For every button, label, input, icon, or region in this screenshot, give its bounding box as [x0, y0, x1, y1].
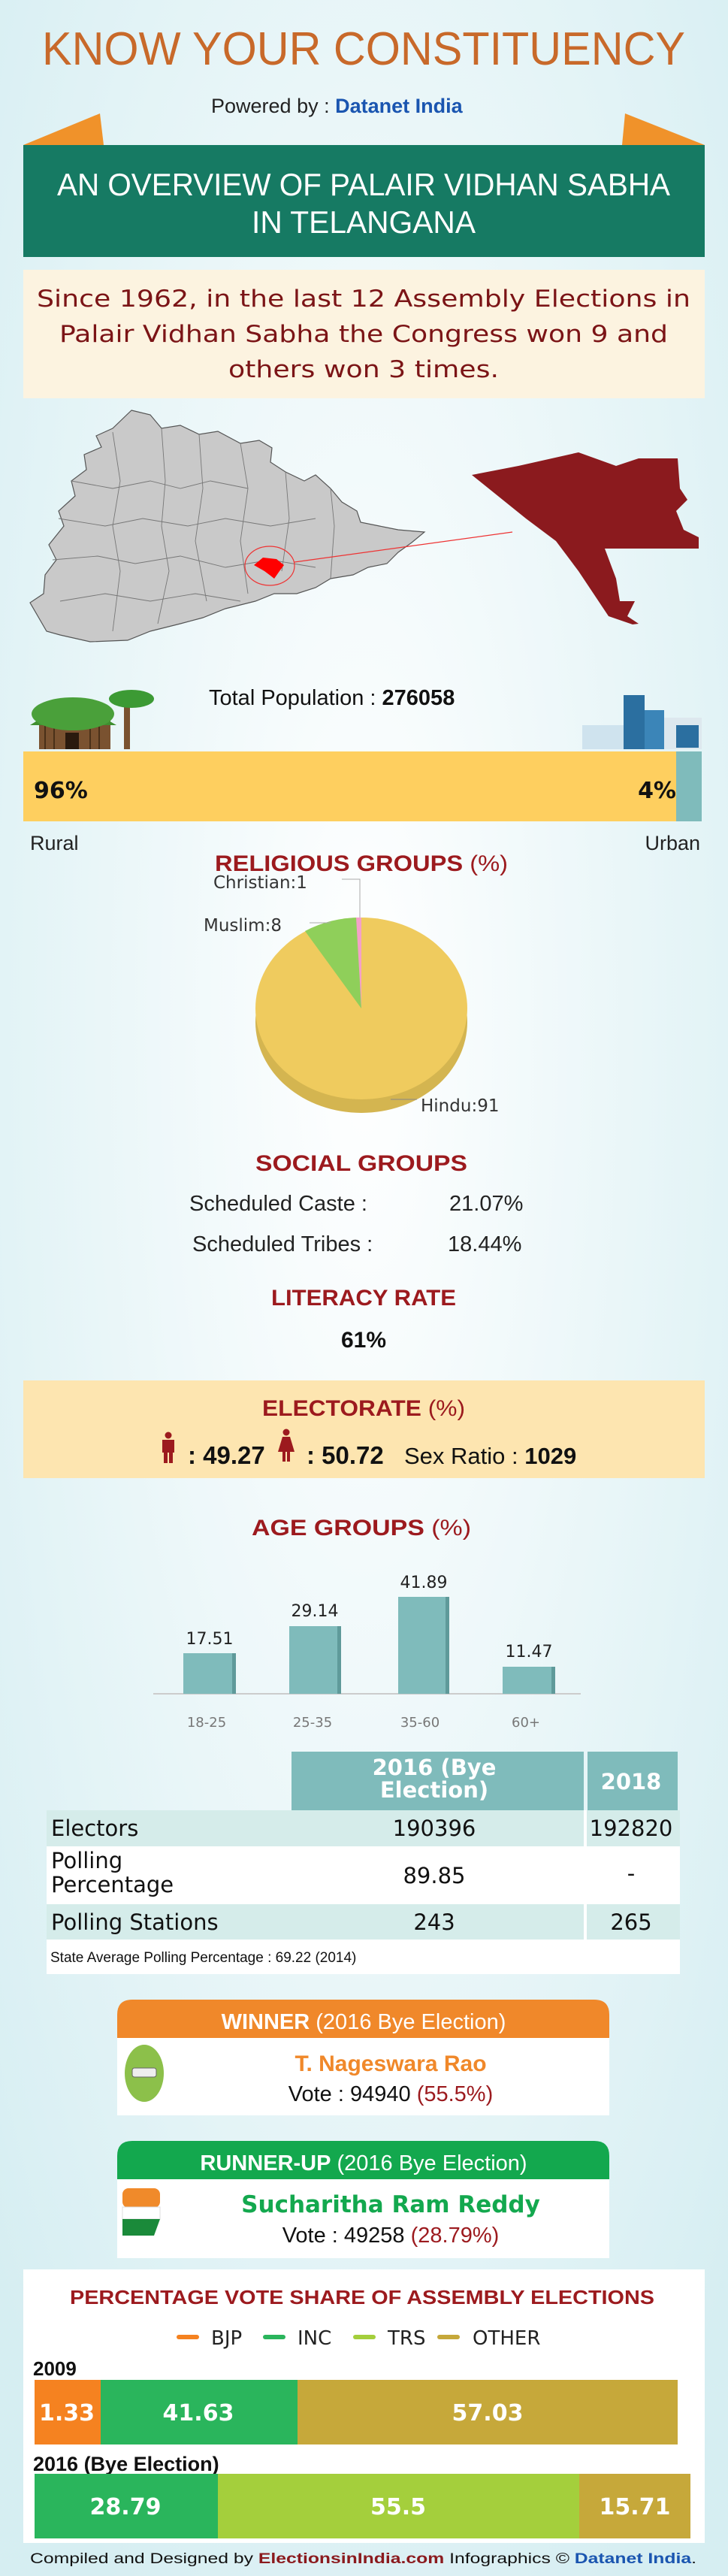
social groups values: 21.07%	[449, 1192, 523, 1216]
bar chart: age groups: 17.51	[186, 1630, 233, 1649]
social groups values: Scheduled Tribes :	[192, 1232, 373, 1256]
panel: runner-up: Vote : 49258 (28.79%)	[282, 2224, 499, 2248]
icon: rural hut	[30, 690, 154, 749]
panel: winner: Vote : 94940 (55.5%)	[288, 2082, 493, 2106]
title: KNOW YOUR CONSTITUENCY	[42, 23, 685, 75]
panel: winner: T. Nageswara Rao	[295, 2051, 487, 2076]
summary text block: Since 1962, in the last 12 Assembly Elections in	[37, 286, 690, 313]
banner: overview title: AN OVERVIEW OF PALAIR VIDHAN SABHA	[57, 167, 670, 202]
bar chart: age groups: 11.47	[506, 1643, 552, 1661]
social groups values: 18.44%	[448, 1232, 521, 1256]
map: telangana	[30, 410, 512, 642]
panel: runner-up: RUNNER-UP (2016 Bye Election)	[200, 2151, 527, 2175]
bar chart: age groups: 41.89	[400, 1574, 447, 1592]
table: electors & polling	[47, 1752, 680, 1974]
panel: vote share: 1.33	[39, 2400, 95, 2426]
icon: urban buildings	[582, 695, 702, 749]
legend: INC	[298, 2327, 331, 2350]
table: electors & polling: Polling	[51, 1848, 122, 1873]
table: electors & polling: 2016 (Bye	[373, 1755, 496, 1780]
panel: vote share: 41.63	[163, 2400, 234, 2426]
icon: male	[162, 1432, 174, 1463]
table: electors & polling: -	[627, 1861, 635, 1886]
legend: TRS	[387, 2327, 425, 2350]
table: electors & polling: 192820	[590, 1816, 672, 1841]
table: electors & polling: Percentage	[51, 1872, 174, 1897]
bar chart: age groups: 25-35	[293, 1715, 332, 1731]
heading: literacy rate: LITERACY RATE	[271, 1286, 456, 1311]
table: electors & polling: State Average Polling Percentage : 69.22 (2014)	[50, 1950, 356, 1966]
panel: vote share: PERCENTAGE VOTE SHARE OF ASSEMBLY ELECTIONS	[70, 2286, 654, 2308]
bar chart: age groups: 18-25	[187, 1715, 226, 1731]
panel: winner: WINNER (2016 Bye Election)	[222, 2010, 506, 2034]
footer: Compiled and Designed by ElectionsinIndia.com Infographics © Datanet India .	[30, 2551, 696, 2567]
map: constituency detail	[472, 452, 699, 624]
icon: female	[278, 1429, 295, 1462]
legend: OTHER	[473, 2327, 540, 2350]
panel: vote share: 28.79	[90, 2494, 161, 2520]
legend: BJP	[211, 2327, 242, 2350]
panel: vote share: 55.5	[370, 2494, 426, 2520]
social groups values	[189, 1192, 523, 1256]
pie chart: Christian:1	[213, 873, 307, 893]
table: electors & polling: 243	[413, 1909, 455, 1935]
rural/urban bar: 96%	[34, 778, 88, 804]
panel: electorate	[23, 1380, 705, 1478]
panel: vote share: 15.71	[600, 2494, 670, 2520]
panel: vote share	[23, 2269, 705, 2543]
table: electors & polling: 2018	[601, 1769, 661, 1794]
table: electors & polling: Polling Stations	[51, 1909, 219, 1935]
bar chart: age groups: 35-60	[400, 1715, 440, 1731]
table: electors & polling: 190396	[393, 1816, 476, 1841]
rural/urban bar	[23, 751, 702, 821]
panel: electorate: ELECTORATE (%)	[262, 1396, 465, 1421]
summary text block: others won 3 times.	[228, 356, 499, 383]
icon: hand symbol	[122, 2188, 160, 2236]
social groups values: Scheduled Caste :	[189, 1192, 367, 1216]
table: electors & polling: Electors	[51, 1816, 138, 1841]
banner: overview title: IN TELANGANA	[252, 204, 476, 240]
bar chart: age groups	[153, 1574, 581, 1731]
pie chart	[204, 873, 499, 1116]
panel: electorate: : 50.72	[307, 1441, 384, 1469]
panel: vote share: 2009	[33, 2357, 77, 2380]
heading: age groups: AGE GROUPS (%)	[252, 1516, 471, 1540]
summary text block	[23, 270, 705, 398]
pie chart: Muslim:8	[204, 916, 282, 936]
panel: winner	[117, 2000, 609, 2115]
panel: runner-up: Sucharitha Ram Reddy	[241, 2191, 540, 2218]
panel: runner-up	[117, 2141, 609, 2258]
literacy value: 61%	[341, 1328, 386, 1353]
pie chart: Hindu:91	[421, 1096, 499, 1116]
heading: religious groups: RELIGIOUS GROUPS (%)	[215, 851, 508, 876]
labels rural/urban: Urban	[645, 832, 700, 854]
summary text block: Palair Vidhan Sabha the Congress won 9 and	[59, 321, 668, 348]
total population: Total Population : 276058	[209, 686, 455, 710]
panel: electorate: Sex Ratio : 1029	[404, 1443, 576, 1469]
panel: electorate: : 49.27	[188, 1441, 265, 1469]
bar chart: age groups: 29.14	[292, 1602, 338, 1621]
panel: vote share: 2016 (Bye Election)	[33, 2453, 219, 2475]
panel: vote share: 57.03	[452, 2400, 523, 2426]
table: electors & polling: Election)	[380, 1777, 488, 1803]
table: electors & polling: 89.85	[403, 1863, 466, 1888]
heading: social groups: SOCIAL GROUPS	[255, 1151, 467, 1176]
powered by: Powered by : Datanet India	[211, 95, 464, 117]
icon: car symbol	[125, 2045, 164, 2102]
legend	[177, 2327, 540, 2350]
bar chart: age groups: 60+	[512, 1715, 540, 1731]
table: electors & polling: 265	[610, 1909, 652, 1935]
ribbons	[23, 113, 705, 145]
labels rural/urban	[30, 832, 700, 854]
rural/urban bar: 4%	[638, 778, 676, 804]
labels rural/urban: Rural	[30, 832, 79, 854]
banner: overview title	[23, 145, 705, 257]
